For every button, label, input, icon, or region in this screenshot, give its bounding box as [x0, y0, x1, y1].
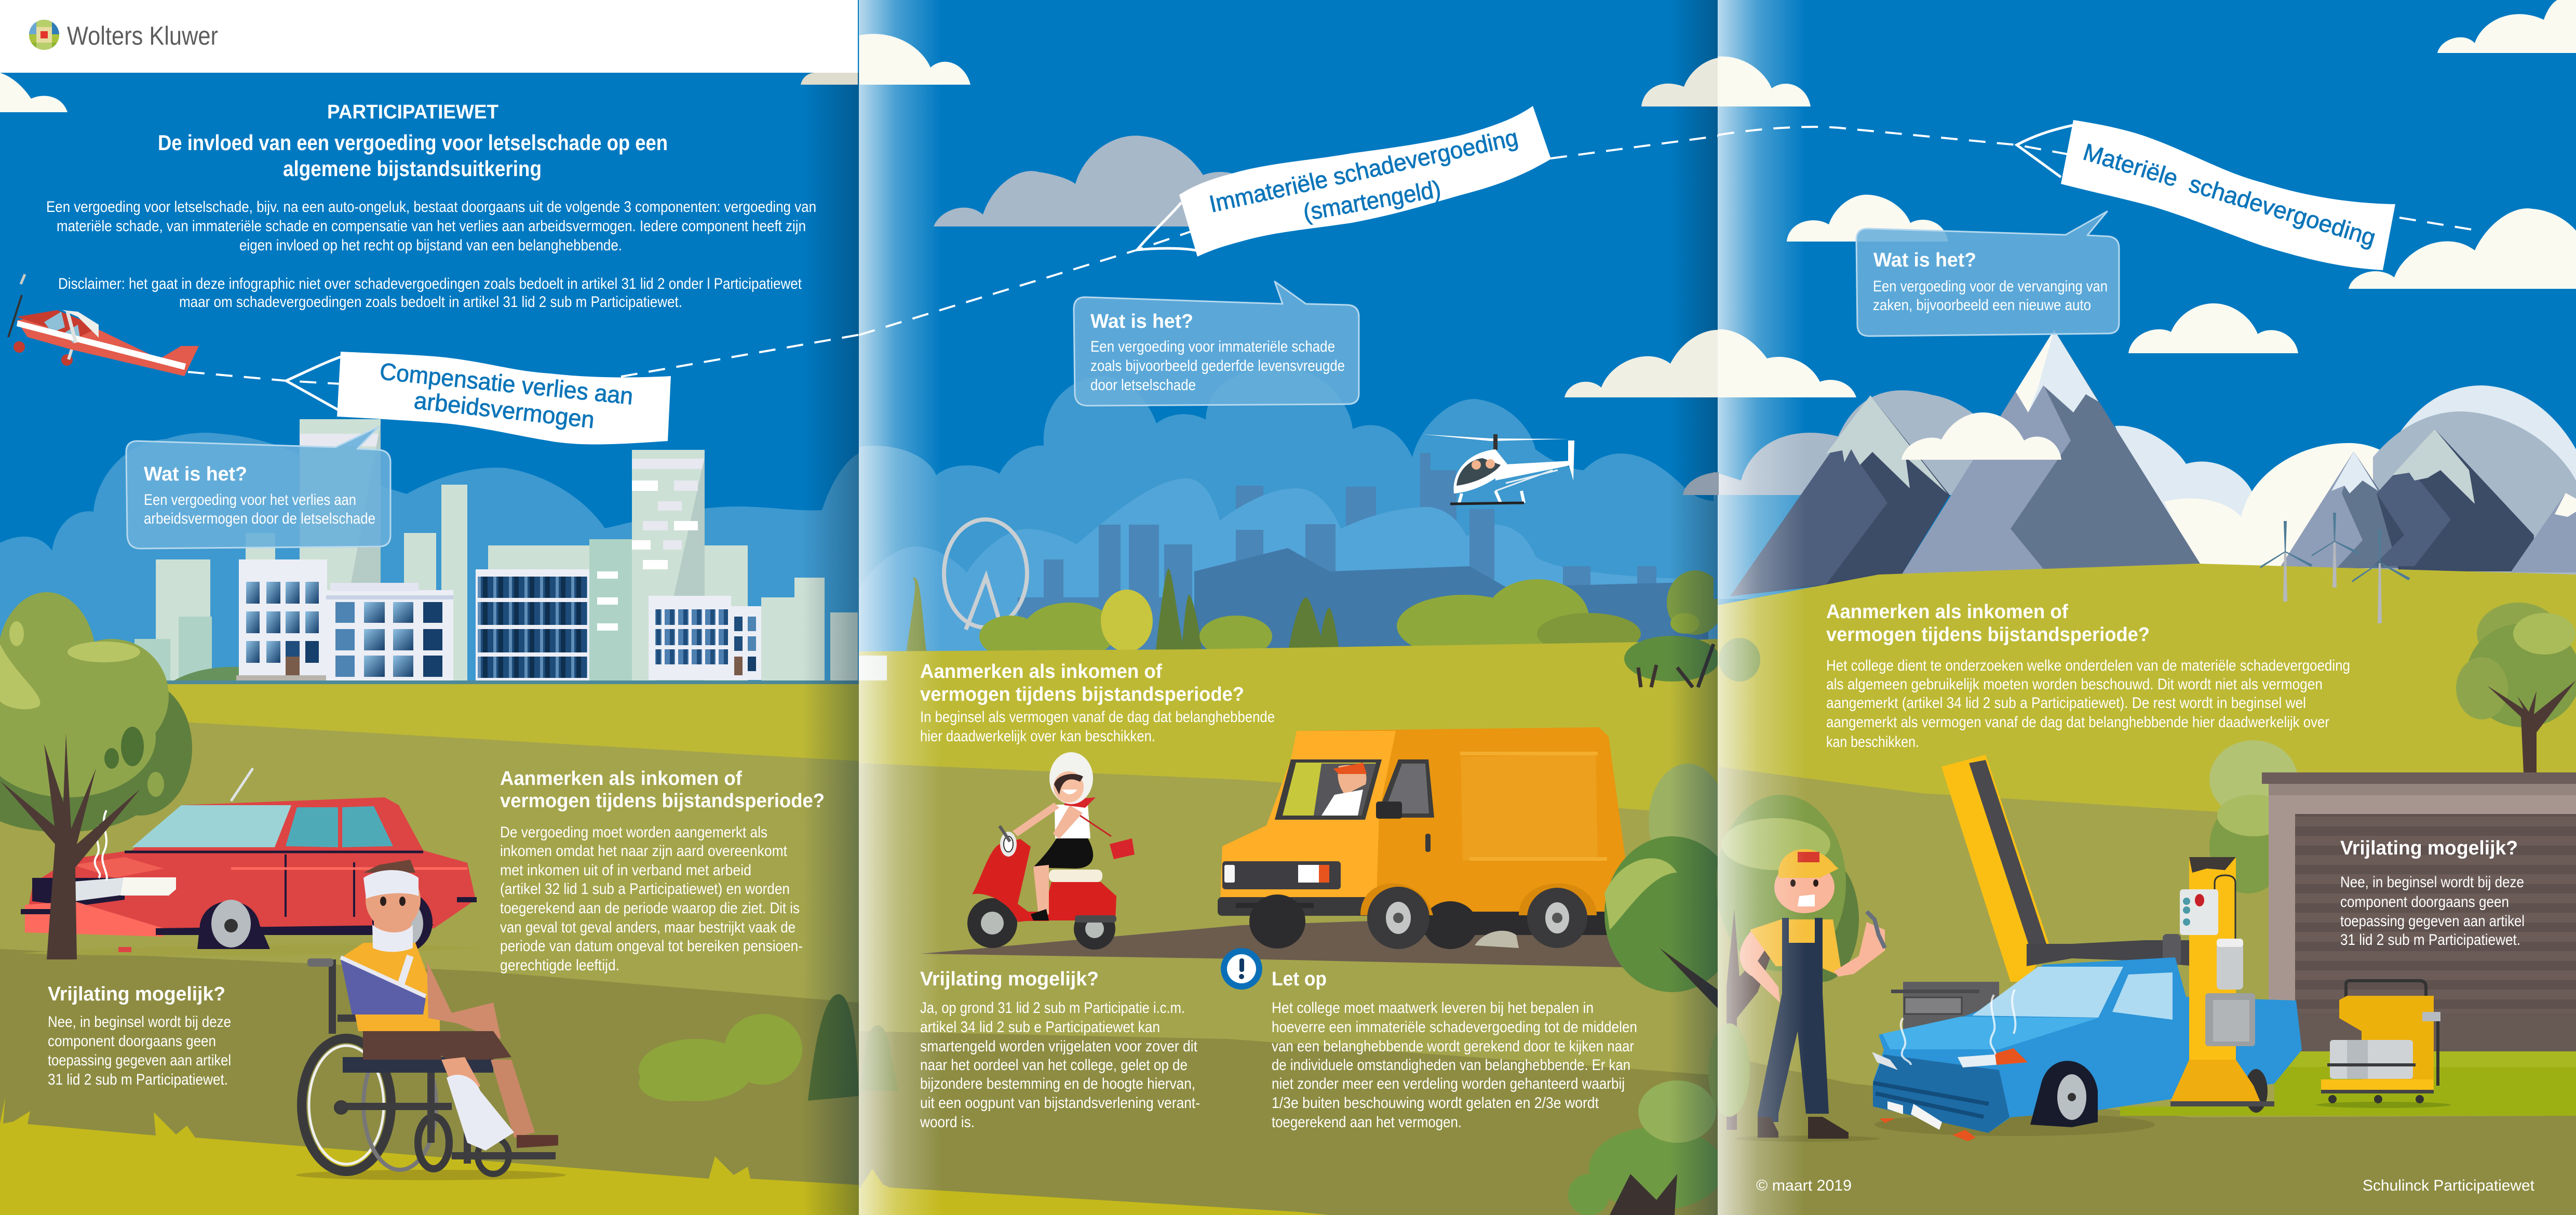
text block: aanmerken, arbeidsvermogen: vermogen tijdens bijstandsperiode?	[500, 790, 825, 812]
footer	[1756, 1177, 2535, 1194]
illustration: woman on red scooter	[967, 752, 1135, 950]
illustration: crashed red car	[21, 768, 483, 956]
text block: vrijlating, arbeidsvermogen: Nee, in beginsel wordt bij deze	[48, 1013, 231, 1031]
text block: aanmerken, materieel: kan beschikken.	[1826, 733, 1919, 751]
banner: compensatie: arbeidsvermogen	[413, 386, 596, 433]
callout: wat is het, immaterieel: Wat is het?	[1090, 311, 1193, 332]
fold shading between panels	[802, 0, 1806, 1215]
text block: vrijlating, materieel: component doorgaans geen	[2340, 893, 2509, 911]
text block: let op: Let op	[1272, 968, 1327, 990]
text block: aanmerken, immaterieel: Aanmerken als inkomen of	[920, 661, 1162, 683]
ferris wheel	[944, 519, 1027, 630]
building C	[476, 569, 589, 680]
text block: aanmerken, arbeidsvermogen: inkomen omdat het naar zijn aard overeenkomt	[500, 843, 788, 860]
text block: vrijlating, arbeidsvermogen: component doorgaans geen	[48, 1033, 216, 1050]
green hill behind buildings	[166, 667, 249, 686]
text block: vrijlating, immaterieel: woord is.	[920, 1114, 975, 1131]
illustration: orange van	[1218, 727, 1626, 949]
disclaimer text: Disclaimer: het gaat in deze infographic niet over schadevergoedingen zoals bedoelt in artikel 31 lid 2 onder l Participatiewet	[58, 275, 802, 292]
title block	[158, 101, 668, 181]
tree trunk and branches	[0, 733, 140, 959]
panel: immateriële schadevergoeding	[859, 0, 1739, 1215]
panel: materiële schadevergoeding	[1708, 0, 2576, 1215]
text block: let op: 1/3e buiten beschouwing wordt gelaten en 2/3e wordt	[1272, 1094, 1599, 1112]
bush and cypress	[639, 994, 859, 1101]
road	[920, 914, 1624, 967]
mid-distance cloud layer	[859, 478, 1718, 655]
text block: vrijlating, immaterieel: artikel 34 lid 2 sub e Participatiewet kan	[920, 1019, 1160, 1036]
text block: vrijlating, materieel	[2340, 837, 2525, 949]
text block: let op	[1272, 968, 1637, 1131]
text block: vrijlating, immaterieel: naar het oordeel van het college, gelet op de	[920, 1057, 1188, 1074]
text block: aanmerken, immaterieel: In beginsel als vermogen vanaf de dag dat belanghebbende	[920, 709, 1275, 726]
text block: aanmerken, materieel	[1826, 601, 2350, 751]
text block: let op: Het college moet maatwerk leveren bij het bepalen in	[1272, 999, 1594, 1017]
intro text: eigen invloed op het recht op bijstand van een belanghebbende.	[239, 237, 622, 254]
callout: wat is het, materieel: zaken, bijvoorbeeld een nieuwe auto	[1873, 297, 2091, 314]
text block: aanmerken, arbeidsvermogen: (artikel 32 lid 1 sub a Participatiewet) en worden	[500, 880, 790, 898]
building B	[326, 583, 453, 681]
text block: aanmerken, arbeidsvermogen	[500, 768, 825, 974]
text block: vrijlating, arbeidsvermogen: Vrijlating mogelijk?	[48, 983, 225, 1005]
title block: PARTICIPATIEWET	[327, 101, 498, 123]
building A	[236, 559, 330, 680]
text block: vrijlating, immaterieel: uit een oogpunt van bijstandsverlening verant-	[920, 1094, 1200, 1112]
cypress lower left	[859, 1025, 898, 1091]
ground layers	[0, 680, 859, 1215]
panel: compensatie verlies aan arbeidsvermogen	[0, 0, 862, 1215]
illustration: angry mechanic	[1734, 849, 1885, 1142]
city skyline silhouette, far layer	[1129, 453, 1456, 653]
text block: vrijlating, arbeidsvermogen	[48, 983, 231, 1088]
ground layers	[859, 639, 1718, 1215]
title block: algemene bijstandsuitkering	[283, 156, 542, 181]
text block: vrijlating, materieel: Vrijlating mogelijk?	[2340, 837, 2518, 859]
illustration: helicopter	[1423, 434, 1574, 504]
footer: © maart 2019	[1756, 1177, 1852, 1194]
skyline: pale towers	[134, 419, 858, 686]
text block: aanmerken, immaterieel: vermogen tijdens bijstandsperiode?	[920, 684, 1244, 705]
text block: aanmerken, arbeidsvermogen: gerechtigde leeftijd.	[500, 957, 619, 974]
logo: Wolters Kluwer globe	[29, 20, 59, 50]
mountains	[1730, 330, 2576, 596]
building D and E	[649, 596, 761, 680]
banner: compensatie: Compensatie verlies aan	[379, 357, 635, 410]
text block: vrijlating, materieel: Nee, in beginsel wordt bij deze	[2340, 874, 2524, 891]
text block: vrijlating, immaterieel: Ja, op grond 31 lid 2 sub m Participatie i.c.m.	[920, 999, 1185, 1017]
banner: immaterieel: (smartengeld)	[1301, 175, 1443, 226]
ground layers	[1718, 564, 2576, 1215]
text block: aanmerken, materieel: aangemerkt (artikel 34 lid 2 sub a Participatiewet). De rest wordt in beginsel wel	[1826, 695, 2306, 712]
text block: let op: van een belanghebbende wordt gerekend door te kijken naar	[1272, 1038, 1634, 1055]
text block: vrijlating, materieel: toepassing gegeven aan artikel	[2340, 913, 2525, 930]
text block: aanmerken, arbeidsvermogen: van geval tot geval anders, maar bestrijkt vaak de	[500, 919, 795, 936]
callout: wat is het, materieel: Wat is het?	[1873, 249, 1976, 271]
text block: aanmerken, arbeidsvermogen: periode van datum ongeval tot bereiken pensioen-	[500, 938, 803, 955]
text block: aanmerken, arbeidsvermogen: Aanmerken als inkomen of	[500, 768, 742, 790]
banner: immaterieel	[1179, 106, 1551, 257]
callout: wat is het, arbeidsvermogen	[126, 426, 390, 549]
distant clouds behind mountains	[1714, 385, 2576, 599]
title block: De invloed van een vergoeding voor letselschade op een	[158, 130, 668, 155]
text block: vrijlating, immaterieel	[920, 968, 1200, 1131]
disclaimer text	[58, 275, 802, 311]
banner: immaterieel: Immateriële schadevergoeding	[1207, 124, 1520, 218]
text block: aanmerken, arbeidsvermogen: toegerekend aan de periode waarop die ziet. Dit is	[500, 900, 800, 917]
callout: wat is het, arbeidsvermogen: Een vergoeding voor het verlies aan	[144, 491, 356, 509]
tree foliage	[0, 592, 192, 832]
callout: wat is het, materieel: Een vergoeding voor de vervanging van	[1873, 278, 2108, 295]
illustration: wrecked blue car	[1872, 957, 2302, 1141]
text block: vrijlating, immaterieel: smartengeld worden vrijgelaten voor zover dit	[920, 1038, 1198, 1055]
callout: wat is het, immaterieel	[1074, 282, 1359, 406]
text block: let op: de individuele omstandigheden van belanghebbende. Er kan	[1272, 1057, 1630, 1074]
logo wordmark: Wolters Kluwer	[67, 21, 218, 50]
callout: wat is het, arbeidsvermogen: arbeidsvermogen door de letselschade	[144, 510, 375, 527]
text block: aanmerken, materieel: Het college dient te onderzoeken welke onderdelen van de materiële schadevergoeding	[1826, 657, 2350, 674]
trees on the right of the panel	[1568, 636, 1739, 1215]
intro text: Een vergoeding voor letselschade, bijv. na een auto-ongeluk, bestaat doorgaans uit de volgende 3 componenten: vergoeding van	[46, 198, 816, 216]
text block: let op: toegerekend aan het vermogen.	[1272, 1114, 1462, 1131]
trees	[1708, 603, 2576, 1130]
city skyline silhouette, near layer	[1018, 509, 1708, 655]
text block: vrijlating, arbeidsvermogen: toepassing gegeven aan artikel	[48, 1052, 231, 1069]
callout: wat is het, immaterieel: door letselschade	[1090, 377, 1196, 394]
intro text	[46, 198, 816, 254]
illustration: man in wheelchair	[296, 860, 566, 1180]
footer: Schulinck Participatiewet	[2363, 1177, 2535, 1194]
wind turbines	[2260, 513, 2409, 623]
illustration: yellow service machine	[2316, 981, 2451, 1108]
text block: vrijlating, arbeidsvermogen: 31 lid 2 sub m Participatiewet.	[48, 1071, 228, 1088]
disclaimer text: maar om schadevergoedingen zoals bedoelt in artikel 31 lid 2 sub m Participatiewet.	[179, 293, 682, 311]
horizon bushes and cypress trees	[906, 569, 1724, 660]
towing lines	[188, 125, 2472, 410]
banner: materieel: Materiële schadevergoeding	[2080, 138, 2379, 251]
banner: materieel	[2061, 120, 2395, 270]
text block: aanmerken, materieel: als algemeen gebruikelijk moeten worden beschouwd. Dit wordt niet als vermogen	[1826, 676, 2323, 693]
text block: let op: hoeverre een immateriële schadevergoeding tot de middelen	[1272, 1019, 1637, 1036]
illustration: lift column and controls	[2170, 857, 2274, 1106]
illustration: collapsed car lift arm	[1891, 755, 2194, 1044]
text block: aanmerken, arbeidsvermogen: met inkomen uit of in verband met arbeid	[500, 862, 751, 879]
text block: let op: niet zonder meer een verdeling worden gehanteerd waarbij	[1272, 1075, 1625, 1092]
garage building	[2120, 772, 2576, 1116]
airplane	[8, 274, 199, 376]
callout: wat is het, arbeidsvermogen: Wat is het?	[144, 463, 247, 485]
text block: vrijlating, immaterieel: Vrijlating mogelijk?	[920, 968, 1099, 990]
text block: aanmerken, immaterieel: hier daadwerkelijk over kan beschikken.	[920, 728, 1155, 745]
intro text: materiële schade, van immateriële schade en compensatie van het verlies aan arbeidsvermogen. Iedere component heeft zijn	[57, 218, 806, 235]
icon: let op exclamation	[1221, 948, 1262, 990]
clouds	[0, 0, 2576, 495]
header bar with logo	[0, 0, 858, 73]
text block: aanmerken, arbeidsvermogen: De vergoeding moet worden aangemerkt als	[500, 824, 767, 841]
text block: aanmerken, immaterieel	[920, 661, 1275, 745]
text block: vrijlating, immaterieel: bijzondere bestemming en de hoogte hiervan,	[920, 1075, 1195, 1092]
text block: aanmerken, materieel: vermogen tijdens bijstandsperiode?	[1826, 624, 2150, 646]
text block: aanmerken, materieel: Aanmerken als inkomen of	[1826, 601, 2068, 623]
banner: compensatie	[337, 352, 671, 445]
callout: wat is het, materieel	[1856, 211, 2119, 336]
text block: aanmerken, materieel: aangemerkt als vermogen vanaf de dag dat belanghebbende hier daadwerkelijk over	[1826, 714, 2329, 731]
callout: wat is het, immaterieel: zoals bijvoorbeeld gederfde levensvreugde	[1090, 357, 1345, 375]
cloud backdrop behind skyline	[859, 366, 1719, 655]
callout: wat is het, immaterieel: Een vergoeding voor immateriële schade	[1090, 338, 1335, 355]
cloud backdrop behind city	[0, 433, 862, 686]
cloud under banner	[2349, 208, 2576, 289]
text block: vrijlating, materieel: 31 lid 2 sub m Participatiewet.	[2340, 931, 2520, 949]
